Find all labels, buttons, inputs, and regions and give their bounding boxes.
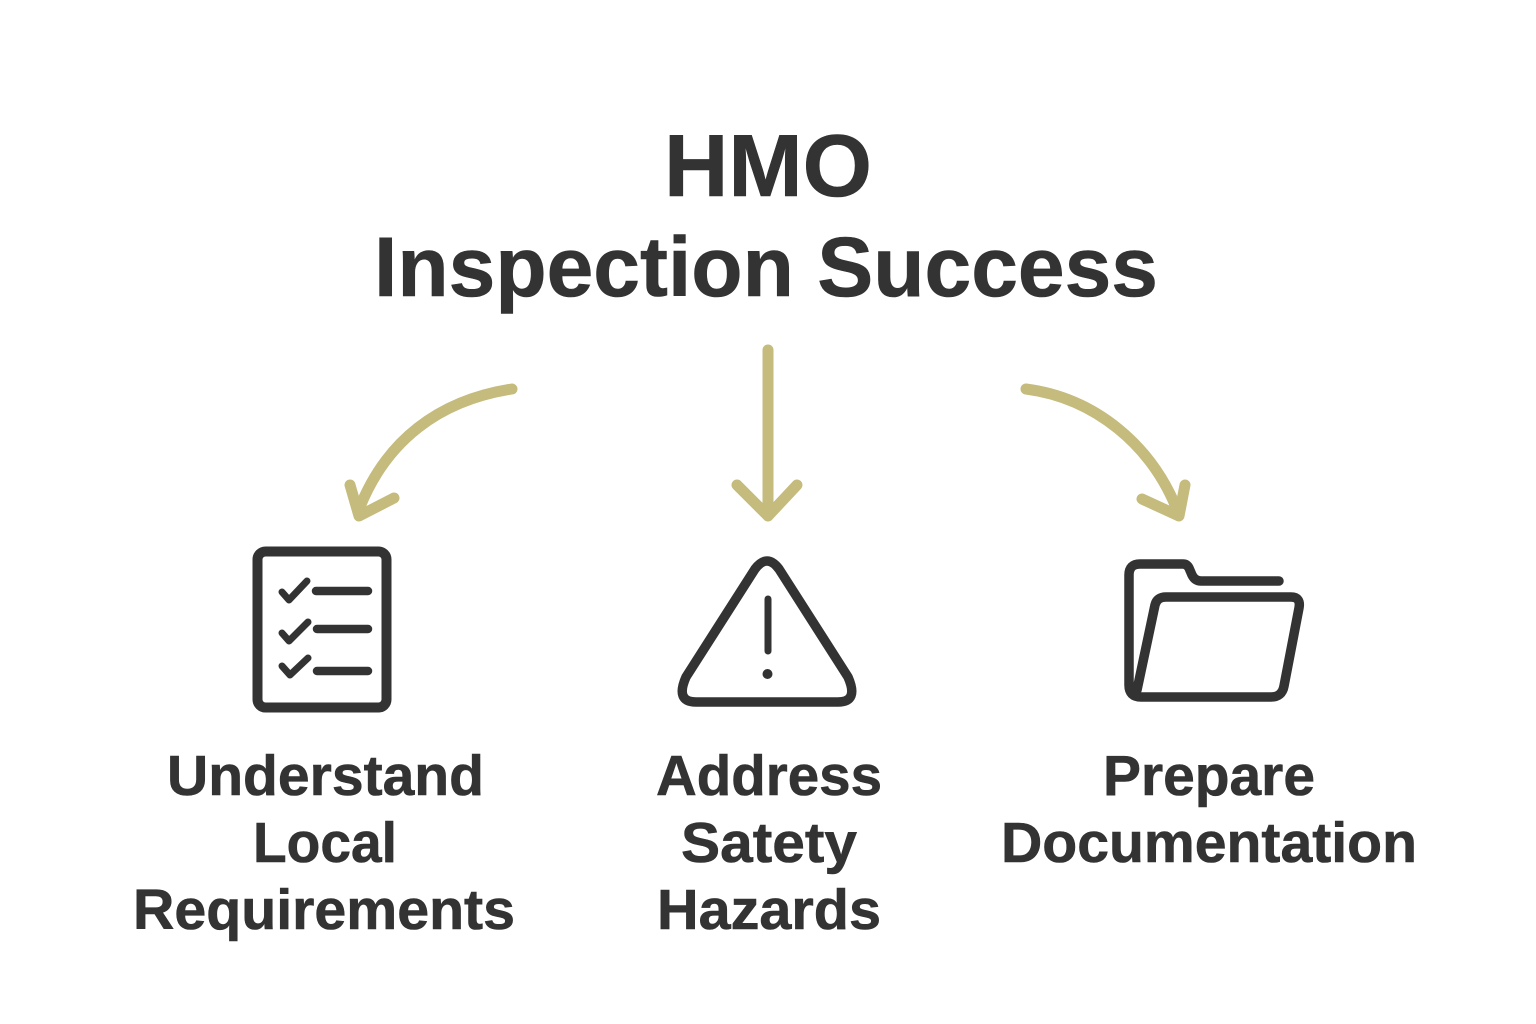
arrow: right curved (1026, 389, 1185, 516)
icon: checklist (258, 552, 386, 708)
label: prepare documentation: Prepare (1103, 744, 1315, 808)
label: understand local requirements: Requirements (133, 878, 515, 942)
label: address safety hazards: Hazards (657, 878, 881, 942)
label: understand local requirements (133, 744, 515, 942)
title (374, 116, 1158, 314)
arrow: centre straight (737, 350, 797, 516)
label: prepare documentation (1001, 744, 1417, 875)
label: address safety hazards: Address (656, 744, 882, 808)
label: understand local requirements: Understand (167, 744, 484, 808)
arrow: left curved (350, 389, 512, 516)
label: address safety hazards: Satety (681, 811, 857, 875)
label: understand local requirements: Local (253, 811, 397, 875)
icon: folder (1129, 564, 1299, 697)
icon: warning triangle (682, 561, 852, 702)
label: prepare documentation: Documentation (1001, 811, 1417, 875)
label: address safety hazards (656, 744, 882, 942)
title: HMO (664, 116, 872, 215)
title: Inspection Success (374, 220, 1158, 314)
